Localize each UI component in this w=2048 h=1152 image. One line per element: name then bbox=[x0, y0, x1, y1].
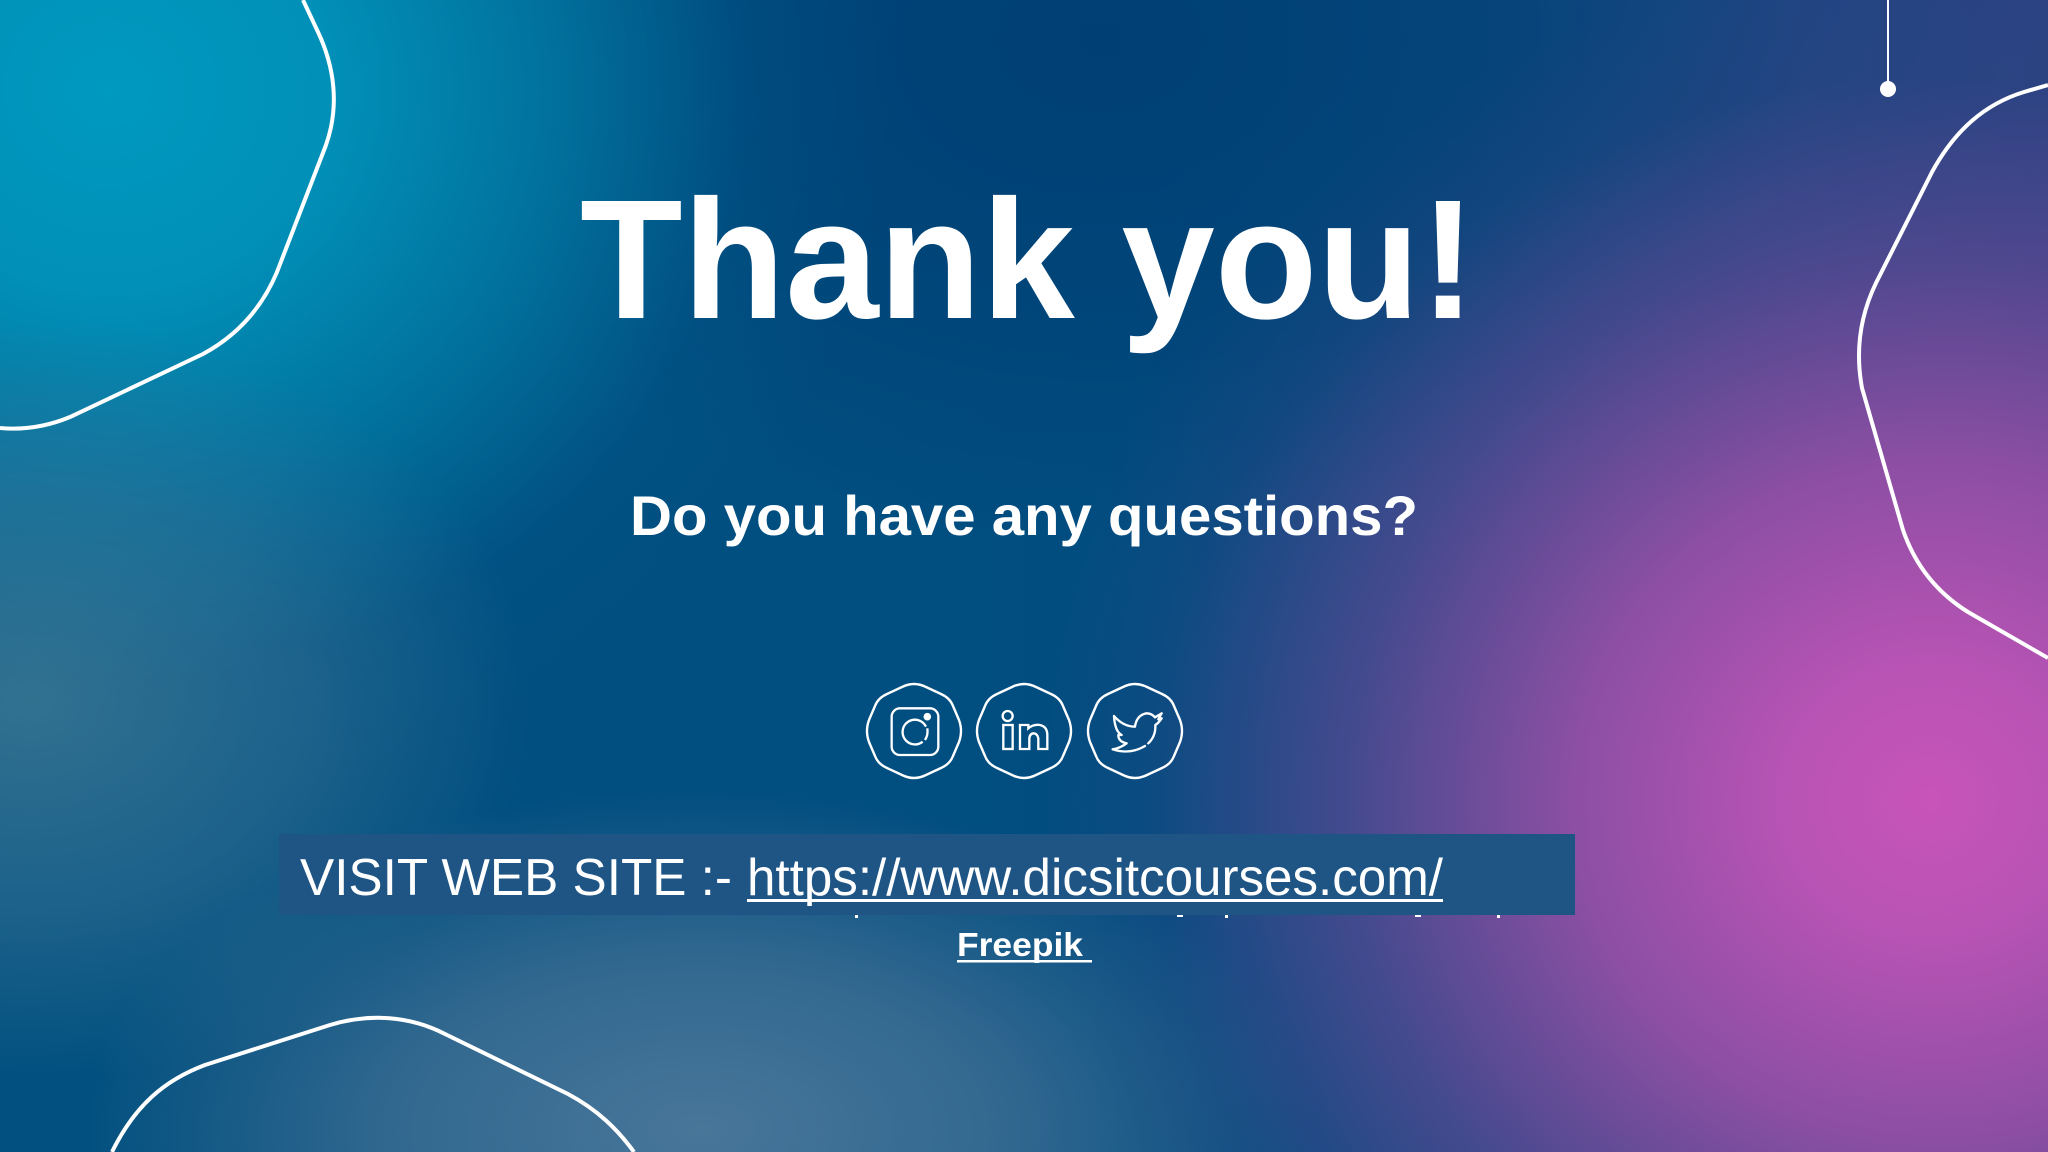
banner text: https://www.dicsitcourses.com/ bbox=[747, 849, 1444, 907]
social icons bbox=[867, 684, 1182, 778]
banner text: VISIT WEB SITE :- bbox=[300, 849, 732, 907]
icon: twitter bbox=[1088, 684, 1182, 778]
website banner bbox=[279, 834, 1575, 915]
shape outline: top left bbox=[0, 0, 334, 429]
pin decoration bbox=[1880, 0, 1896, 97]
icon: instagram bbox=[867, 684, 961, 778]
title: Thank you! bbox=[580, 165, 1476, 355]
icon: linkedin bbox=[977, 684, 1071, 778]
subtitle: Do you have any questions? bbox=[630, 484, 1418, 547]
shape outline: bottom bbox=[112, 1018, 634, 1152]
clipped descenders of hidden text line bbox=[855, 915, 1500, 918]
freepik credit: Freepik bbox=[957, 926, 1084, 963]
shape outline: right bbox=[1859, 85, 2048, 658]
banner text bbox=[300, 849, 1444, 907]
